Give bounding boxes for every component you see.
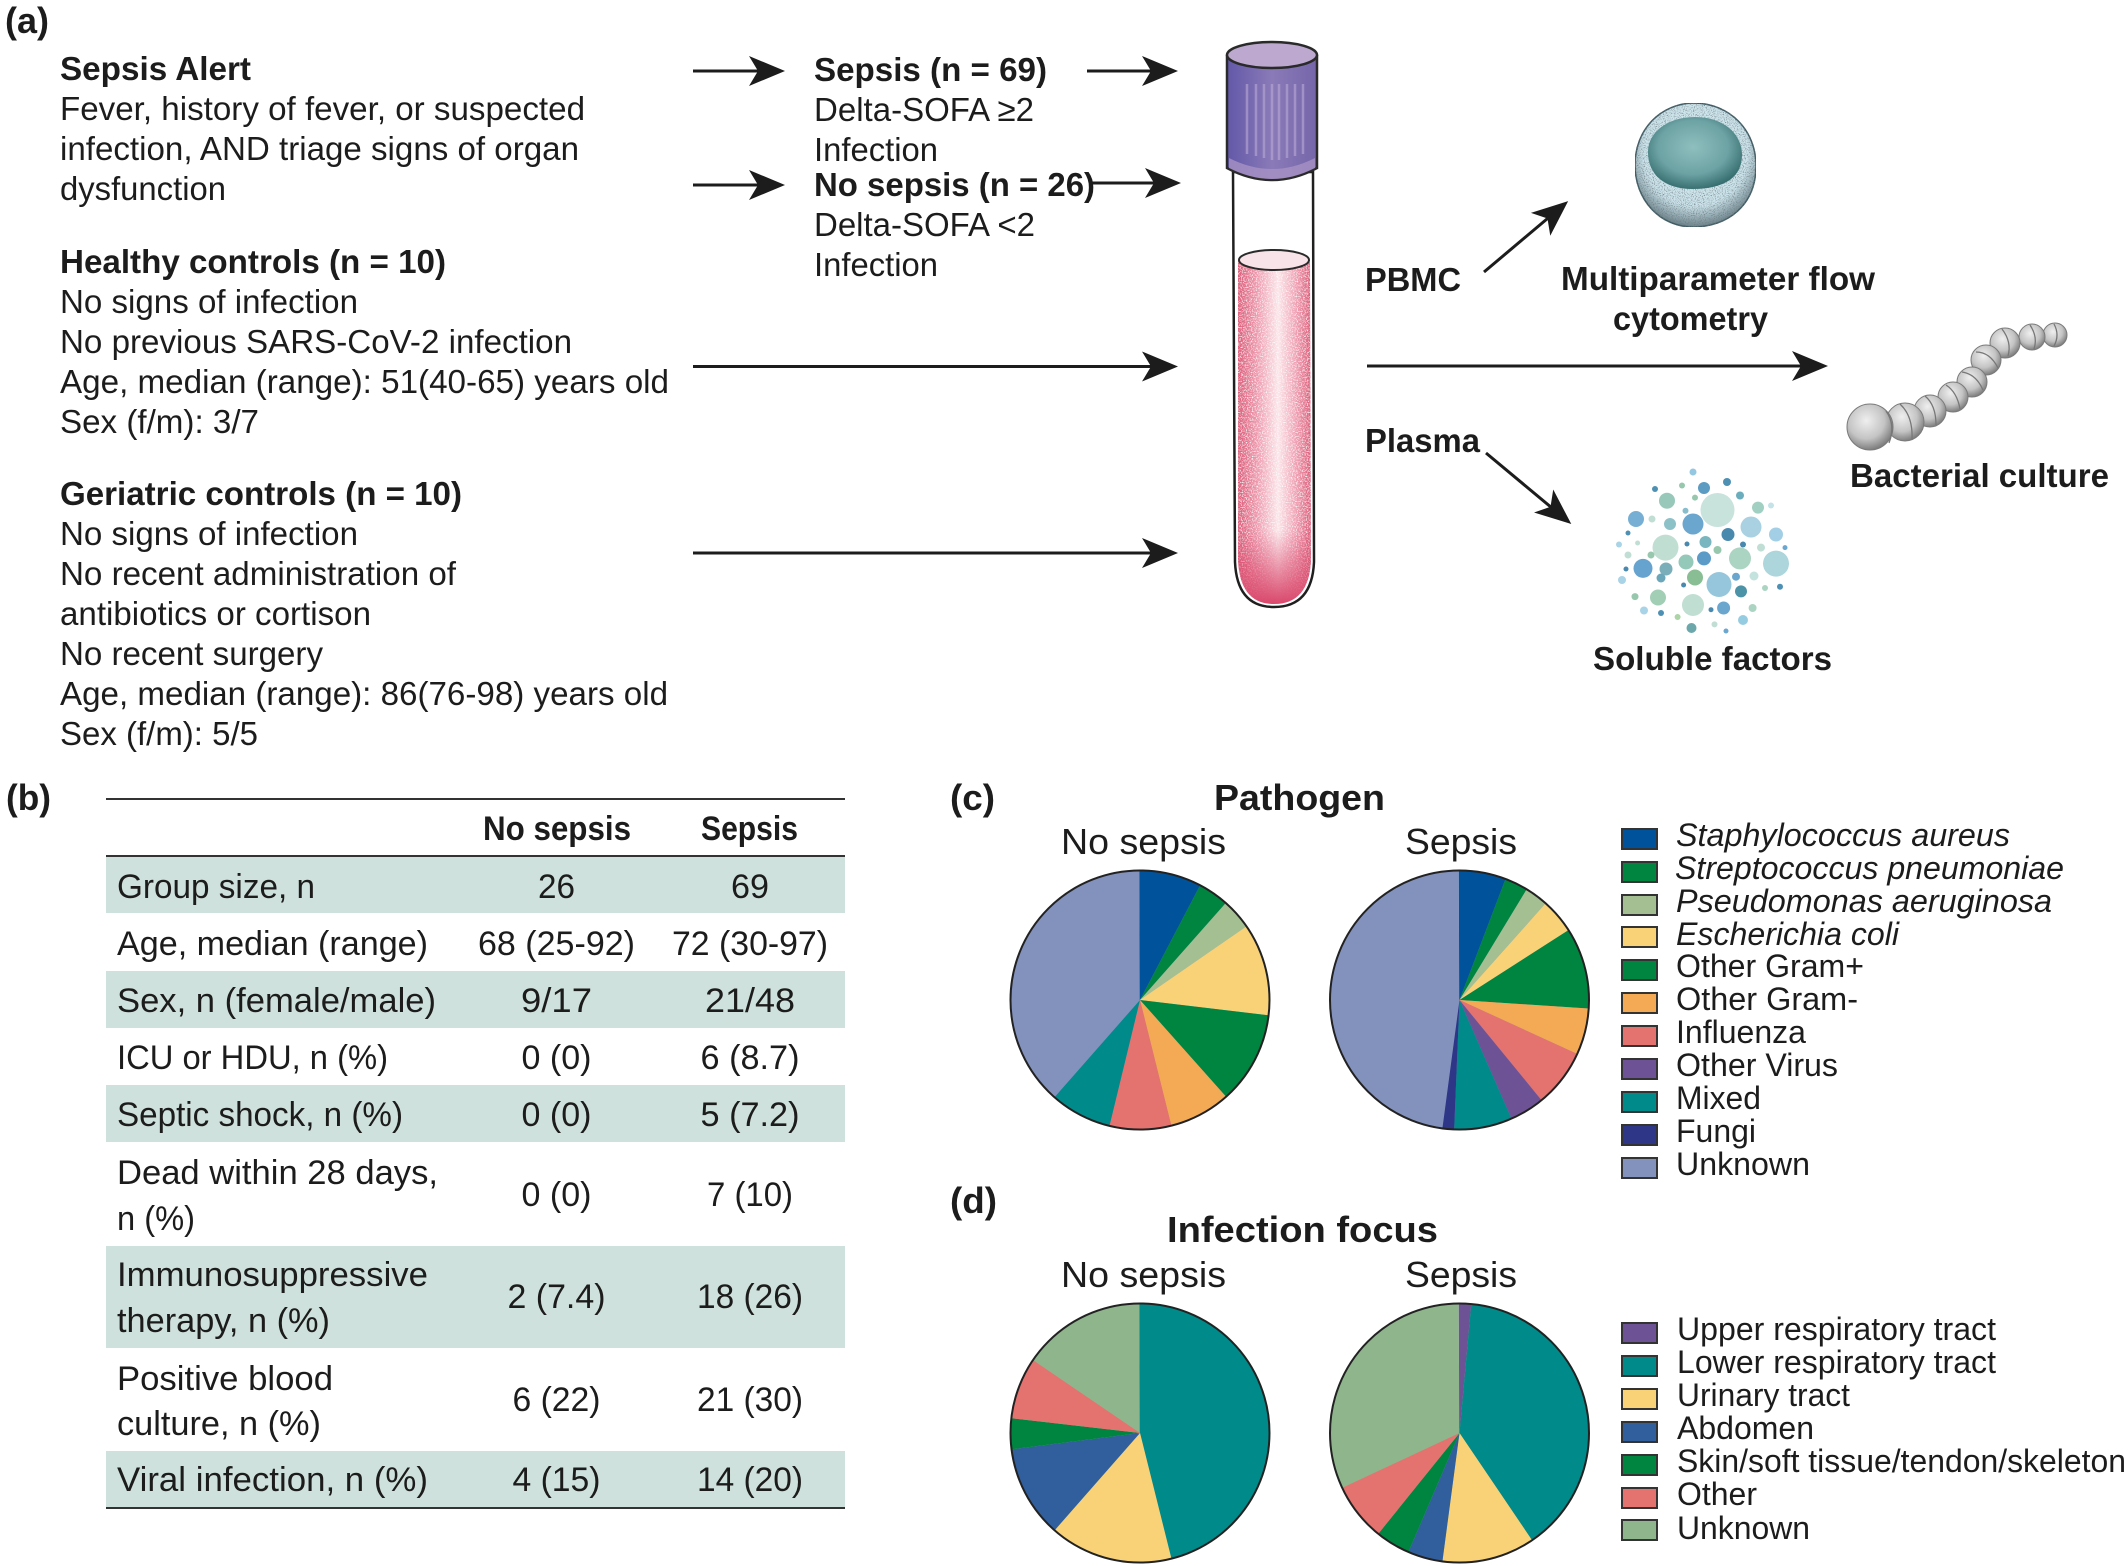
legend: infection focus: Unknown <box>1677 1510 1810 1546</box>
table: patient characteristics: 14 (20) <box>697 1461 803 1499</box>
arrow: plasma to soluble factors <box>1476 441 1581 536</box>
text block: no sepsis group <box>814 166 1095 283</box>
heading: infection focus: Infection focus <box>1167 1209 1438 1250</box>
panel label: (d): (d) <box>950 1180 997 1221</box>
text block: healthy controls <box>60 243 669 440</box>
pie chart: pathogen, no sepsis <box>1010 870 1270 1130</box>
arrow: sepsis alert to no sepsis group <box>693 170 785 200</box>
text block: sepsis alert criteria: Fever, history of fever, or suspected <box>60 90 585 127</box>
caption: bacterial culture: Bacterial culture <box>1850 457 2109 494</box>
label: infection focus sepsis: Sepsis <box>1405 1254 1517 1295</box>
label: pathogen no sepsis: No sepsis <box>1061 821 1226 862</box>
arrow: no sepsis group to blood tube <box>1090 168 1181 198</box>
text block: geriatric controls: antibiotics or cortison <box>60 595 371 632</box>
table: patient characteristics: 68 (25-92) <box>478 925 635 963</box>
panel label: (a): (a) <box>5 0 49 41</box>
text block: sepsis group: Infection <box>814 131 938 168</box>
text block: healthy controls: Age, median (range): 51(40-65) years old <box>60 363 669 400</box>
legend: infection focus: Other <box>1677 1476 1757 1512</box>
text block: sepsis alert criteria: infection, AND triage signs of organ <box>60 130 579 167</box>
table: patient characteristics: 69 <box>731 868 769 906</box>
label: pathogen sepsis: Sepsis <box>1405 821 1517 862</box>
legend: pathogen: Pseudomonas aeruginosa <box>1676 883 2052 919</box>
text block: no sepsis group: No sepsis (n = 26) <box>814 166 1095 203</box>
legend: pathogen: Other Gram+ <box>1676 948 1864 984</box>
legend: infection focus: Lower respiratory tract <box>1677 1344 1996 1380</box>
arrow: healthy controls to blood tube <box>693 352 1178 382</box>
table: patient characteristics: Positive blood <box>117 1360 333 1398</box>
icon: soluble factors <box>1616 468 1789 634</box>
table: patient characteristics: Age, median (range) <box>117 925 428 963</box>
pie chart: infection focus, no sepsis <box>1010 1304 1270 1562</box>
table: patient characteristics: Dead within 28 days, <box>117 1154 438 1192</box>
caption: multiparameter flow cytometry: Multiparameter flow <box>1561 260 1875 297</box>
text block: sepsis alert criteria: dysfunction <box>60 170 226 207</box>
text block: sepsis group <box>814 51 1047 168</box>
text block: geriatric controls: No recent administration of <box>60 555 457 592</box>
table: patient characteristics: culture, n (%) <box>117 1405 321 1443</box>
text block: healthy controls: Healthy controls (n = 10) <box>60 243 446 280</box>
label: plasma: Plasma <box>1365 422 1481 459</box>
icon: immune cell <box>1635 103 1756 227</box>
table: patient characteristics: ICU or HDU, n (%) <box>117 1039 388 1077</box>
pie chart: pathogen, sepsis <box>1330 870 1589 1130</box>
text block: healthy controls: No previous SARS-CoV-2 infection <box>60 323 572 360</box>
text block: geriatric controls <box>60 475 668 752</box>
legend: pathogen: Other Virus <box>1676 1047 1838 1083</box>
panel label: (c): (c) <box>950 777 995 818</box>
text block: no sepsis group: Infection <box>814 246 938 283</box>
text block: geriatric controls: No recent surgery <box>60 635 323 672</box>
legend: pathogen: Mixed <box>1676 1080 1761 1116</box>
label: PBMC: PBMC <box>1365 261 1461 298</box>
table: patient characteristics: 0 (0) <box>522 1096 592 1134</box>
table: patient characteristics: 26 <box>538 868 575 906</box>
heading: pathogen: Pathogen <box>1214 777 1385 818</box>
table: patient characteristics: 4 (15) <box>512 1461 600 1499</box>
legend: pathogen: Fungi <box>1676 1113 1756 1149</box>
icon: bacteria chain <box>1847 323 2067 450</box>
table: patient characteristics: Viral infection, n (%) <box>117 1461 428 1499</box>
legend: pathogen <box>1622 817 2064 1182</box>
legend: infection focus: Skin/soft tissue/tendon/skeleton <box>1677 1443 2126 1479</box>
table: patient characteristics: 6 (22) <box>512 1381 600 1419</box>
legend: pathogen: Unknown <box>1676 1146 1810 1182</box>
table: patient characteristics: Group size, n <box>117 868 315 906</box>
text block: geriatric controls: Age, median (range): 86(76-98) years old <box>60 675 668 712</box>
legend: pathogen: Streptococcus pneumoniae <box>1675 850 2064 886</box>
caption: multiparameter flow cytometry <box>1561 260 1875 337</box>
table: patient characteristics: 0 (0) <box>522 1176 592 1214</box>
text block: geriatric controls: Geriatric controls (n = 10) <box>60 475 462 512</box>
legend: infection focus: Upper respiratory tract <box>1677 1311 1996 1347</box>
text block: geriatric controls: Sex (f/m): 5/5 <box>60 715 258 752</box>
table: patient characteristics: Sepsis <box>701 810 798 848</box>
text block: geriatric controls: No signs of infection <box>60 515 358 552</box>
table: patient characteristics: 21/48 <box>705 982 795 1020</box>
legend: infection focus <box>1622 1311 2126 1546</box>
table: patient characteristics: Sex, n (female/male) <box>117 982 436 1020</box>
arrow: to bacterial culture <box>1367 351 1828 381</box>
arrow: sepsis alert to sepsis group <box>693 56 785 86</box>
table: patient characteristics: Septic shock, n (%) <box>117 1096 403 1134</box>
table: patient characteristics: 2 (7.4) <box>508 1278 606 1316</box>
label: infection focus no sepsis: No sepsis <box>1061 1254 1226 1295</box>
table: patient characteristics: 18 (26) <box>697 1278 803 1316</box>
table: patient characteristics: 21 (30) <box>697 1381 803 1419</box>
icon: blood collection tube <box>1227 42 1317 607</box>
text block: healthy controls: No signs of infection <box>60 283 358 320</box>
legend: infection focus: Urinary tract <box>1677 1377 1850 1413</box>
legend: pathogen: Escherichia coli <box>1676 916 1900 952</box>
text block: healthy controls: Sex (f/m): 3/7 <box>60 403 259 440</box>
table: patient characteristics: therapy, n (%) <box>117 1302 330 1340</box>
arrow: geriatric controls to blood tube <box>693 538 1178 568</box>
panel label: (b): (b) <box>6 777 51 818</box>
legend: pathogen: Other Gram- <box>1676 981 1858 1017</box>
table: patient characteristics <box>106 799 845 1508</box>
table: patient characteristics: n (%) <box>117 1200 195 1238</box>
table: patient characteristics: 72 (30-97) <box>672 925 828 963</box>
text block: sepsis alert criteria <box>60 50 585 207</box>
arrow: sepsis group to blood tube <box>1087 56 1178 86</box>
text block: sepsis group: Delta-SOFA ≥2 <box>814 91 1034 128</box>
legend: infection focus: Abdomen <box>1677 1410 1814 1446</box>
pie chart: infection focus, sepsis <box>1330 1304 1589 1562</box>
arrow: PBMC to flow cytometry <box>1474 190 1578 283</box>
table: patient characteristics: Immunosuppressive <box>117 1256 428 1294</box>
text block: sepsis alert criteria: Sepsis Alert <box>60 50 251 87</box>
table: patient characteristics: 6 (8.7) <box>700 1039 800 1077</box>
table: patient characteristics: 9/17 <box>521 982 592 1020</box>
caption: soluble factors: Soluble factors <box>1593 640 1832 677</box>
table: patient characteristics: 5 (7.2) <box>700 1096 800 1134</box>
legend: pathogen: Staphylococcus aureus <box>1676 817 2010 853</box>
legend: pathogen: Influenza <box>1676 1014 1806 1050</box>
table: patient characteristics: No sepsis <box>483 810 631 848</box>
table: patient characteristics: 0 (0) <box>522 1039 592 1077</box>
text block: no sepsis group: Delta-SOFA <2 <box>814 206 1035 243</box>
table: patient characteristics: 7 (10) <box>707 1176 793 1214</box>
caption: multiparameter flow cytometry: cytometry <box>1613 300 1769 337</box>
text block: sepsis group: Sepsis (n = 69) <box>814 51 1047 88</box>
